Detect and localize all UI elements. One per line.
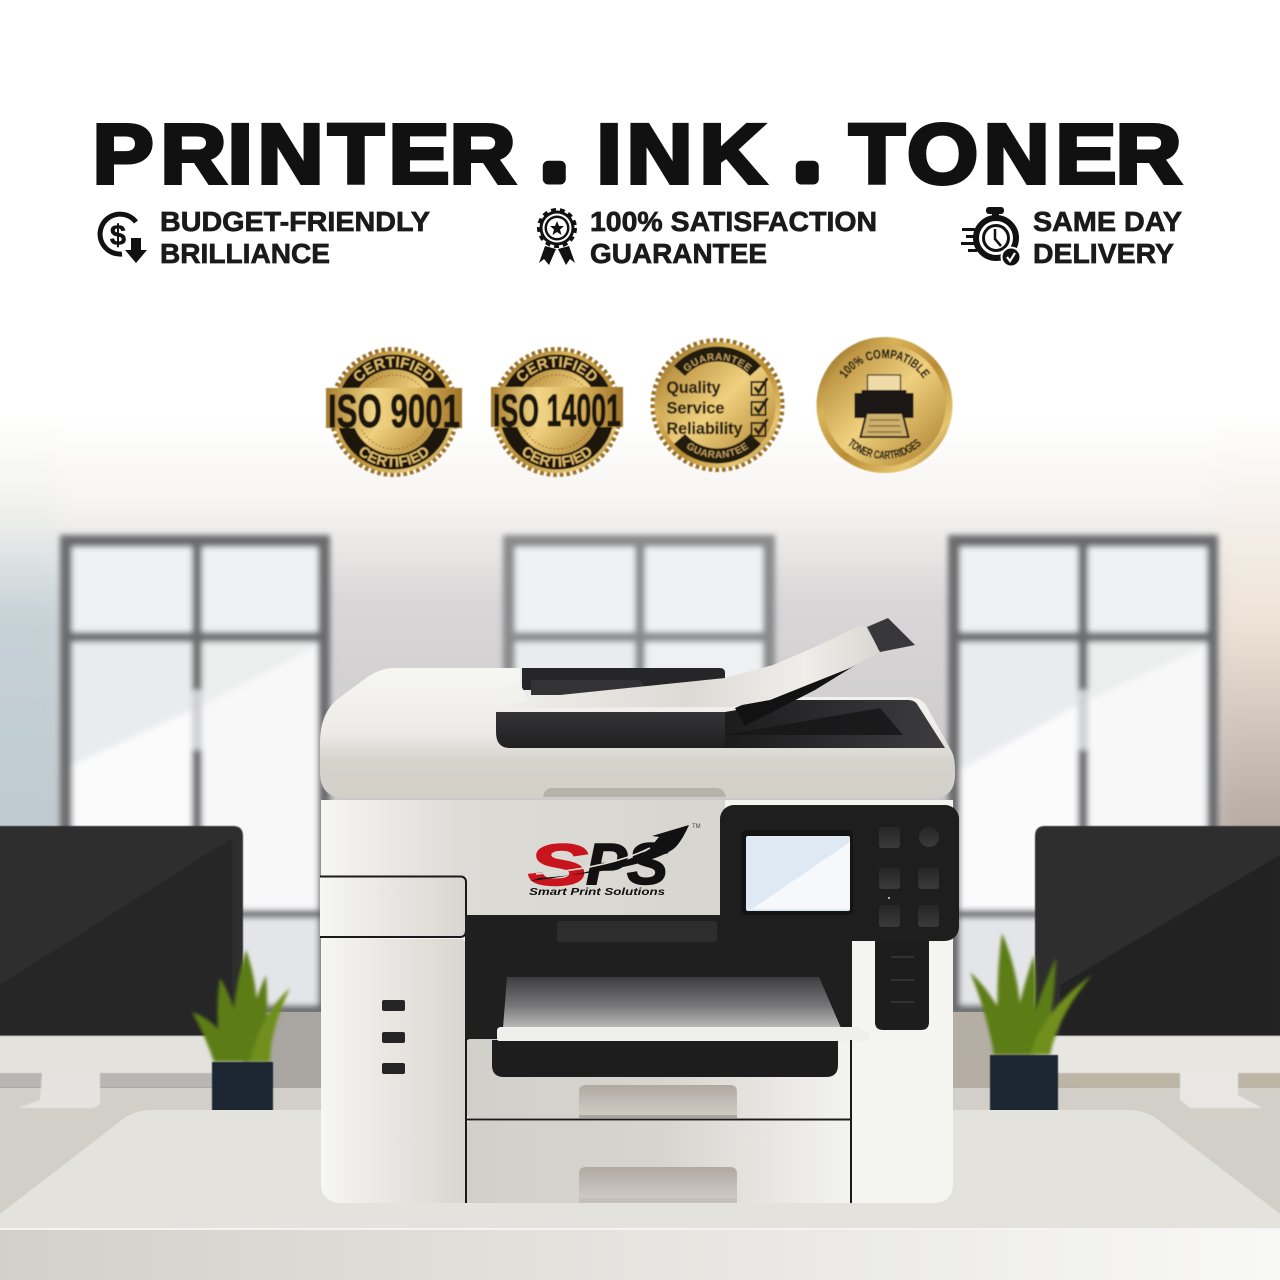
- badge: guarantee: Quality: [666, 378, 721, 397]
- front desk: [0, 1110, 1280, 1228]
- feature text: SAME DAY: [1033, 206, 1182, 237]
- dark scanner plate: [725, 700, 945, 748]
- right monitor: [1035, 826, 1280, 1108]
- badge: 100% compatible: TONER CARTRIDGES: [848, 438, 922, 460]
- scanner lid: [320, 668, 955, 798]
- paper lip: [497, 1027, 870, 1041]
- drawer one: [467, 1039, 850, 1118]
- feature text: BUDGET-FRIENDLY: [160, 206, 430, 237]
- badge: guarantee: Service: [666, 398, 724, 418]
- title: TONER: [849, 107, 1182, 201]
- feeder rear: [522, 668, 725, 690]
- badge: 100% compatible: [816, 336, 954, 474]
- title: PRINTER: [93, 107, 516, 201]
- feature: same day delivery: [961, 206, 1182, 269]
- SPS logo: [528, 824, 701, 898]
- control slot: [875, 935, 929, 1030]
- lid grip: [543, 788, 726, 797]
- panel buttons: [879, 827, 939, 927]
- feature text: [160, 206, 430, 269]
- badge: ISO 9001: [325, 346, 463, 478]
- SPS logo: S: [528, 833, 588, 898]
- feature text: GUARANTEE: [590, 238, 767, 269]
- feature text: 100% SATISFACTION: [590, 206, 877, 237]
- touch screen: [741, 830, 853, 915]
- control panel: [720, 805, 959, 941]
- left window: [60, 535, 330, 1015]
- title: .: [542, 103, 566, 198]
- dark output bay: [465, 915, 852, 1040]
- badge: ISO 14001: CERTIFIED: [522, 446, 592, 468]
- left monitor: [0, 826, 243, 1108]
- icon: medal: [538, 210, 576, 265]
- drawer two: [467, 1121, 850, 1203]
- right plant: [970, 933, 1092, 1112]
- feature text: DELIVERY: [1033, 238, 1174, 269]
- icon: dollar with down arrow: $: [110, 220, 126, 252]
- drawer divider lines: [466, 1039, 851, 1203]
- left door with indicators: [321, 939, 465, 1203]
- document tray: [497, 618, 915, 726]
- front top panel: [321, 800, 725, 915]
- badge: guarantee: Reliability: [666, 419, 743, 438]
- rear desk surface: [0, 1088, 1280, 1230]
- title: INK: [596, 107, 766, 201]
- badge: ISO 9001: CERTIFIED: [353, 356, 434, 382]
- feature text: [1033, 206, 1182, 269]
- badge: ISO 14001: [490, 346, 624, 478]
- center window: [503, 535, 775, 735]
- printer: [320, 618, 959, 1203]
- feature text: [590, 206, 877, 269]
- title: [93, 103, 1182, 201]
- SPS logo: Smart Print Solutions: [529, 886, 665, 898]
- badge: guarantee: [650, 337, 786, 473]
- printer glyph: [854, 375, 914, 437]
- indicator lights: [382, 1000, 405, 1074]
- small left door: [320, 876, 466, 937]
- bay slot: [557, 921, 717, 942]
- SPS logo: TM: [692, 824, 701, 830]
- paper guide: [531, 680, 646, 695]
- badge: ISO 9001: ISO 9001: [328, 385, 460, 437]
- left plant: [192, 950, 290, 1112]
- desk front edge: [0, 1228, 1280, 1280]
- lower wall strip: [0, 1012, 1280, 1090]
- SPS logo: PS: [586, 832, 668, 897]
- drawer one handle: [579, 1085, 737, 1118]
- feature: satisfaction guarantee: [538, 206, 877, 269]
- printer body: [321, 800, 953, 1203]
- badge: ISO 9001: CERTIFIED: [359, 446, 429, 468]
- badge: guarantee: GUARANTEE: [686, 442, 750, 459]
- icon: dollar with down arrow: [100, 214, 147, 263]
- feature: budget-friendly brilliance: [100, 206, 430, 269]
- badge: 100% compatible: 100% COMPATIBLE: [839, 348, 931, 379]
- feature text: BRILLIANCE: [160, 238, 330, 269]
- right window: [948, 535, 1218, 1015]
- output paper: [503, 977, 841, 1028]
- drawer two handle: [579, 1167, 737, 1203]
- icon: stopwatch: [961, 207, 1022, 268]
- feeder front band: [496, 712, 725, 748]
- badge: ISO 14001: CERTIFIED: [516, 356, 598, 382]
- dark bay lip: [492, 1040, 838, 1077]
- title: .: [796, 103, 819, 198]
- badge: guarantee: GUARANTEE: [683, 352, 752, 372]
- badge: ISO 14001: ISO 14001: [493, 385, 621, 436]
